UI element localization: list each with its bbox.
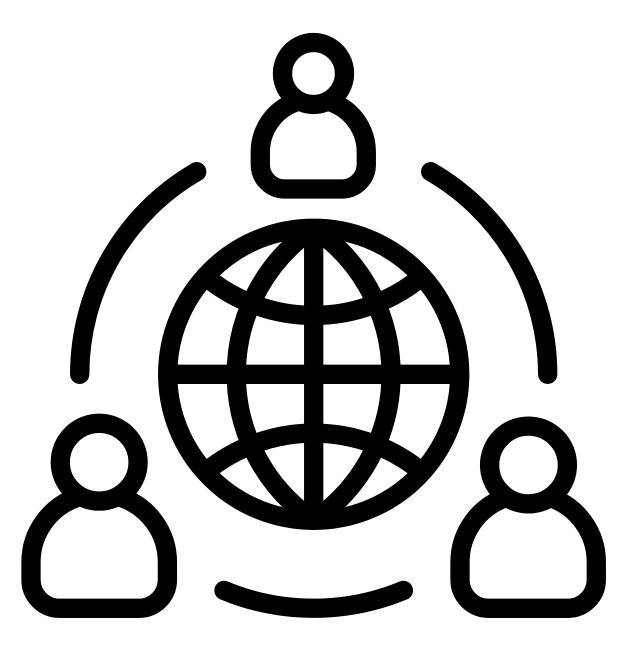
icon: left person bbox=[31, 423, 167, 608]
icon: globe bbox=[168, 228, 460, 520]
arc: bottom bbox=[224, 590, 403, 608]
icon: right person bbox=[460, 426, 596, 608]
arc: upper left bbox=[80, 172, 197, 374]
arc: upper right bbox=[431, 172, 548, 374]
icon: top person bbox=[260, 42, 366, 189]
